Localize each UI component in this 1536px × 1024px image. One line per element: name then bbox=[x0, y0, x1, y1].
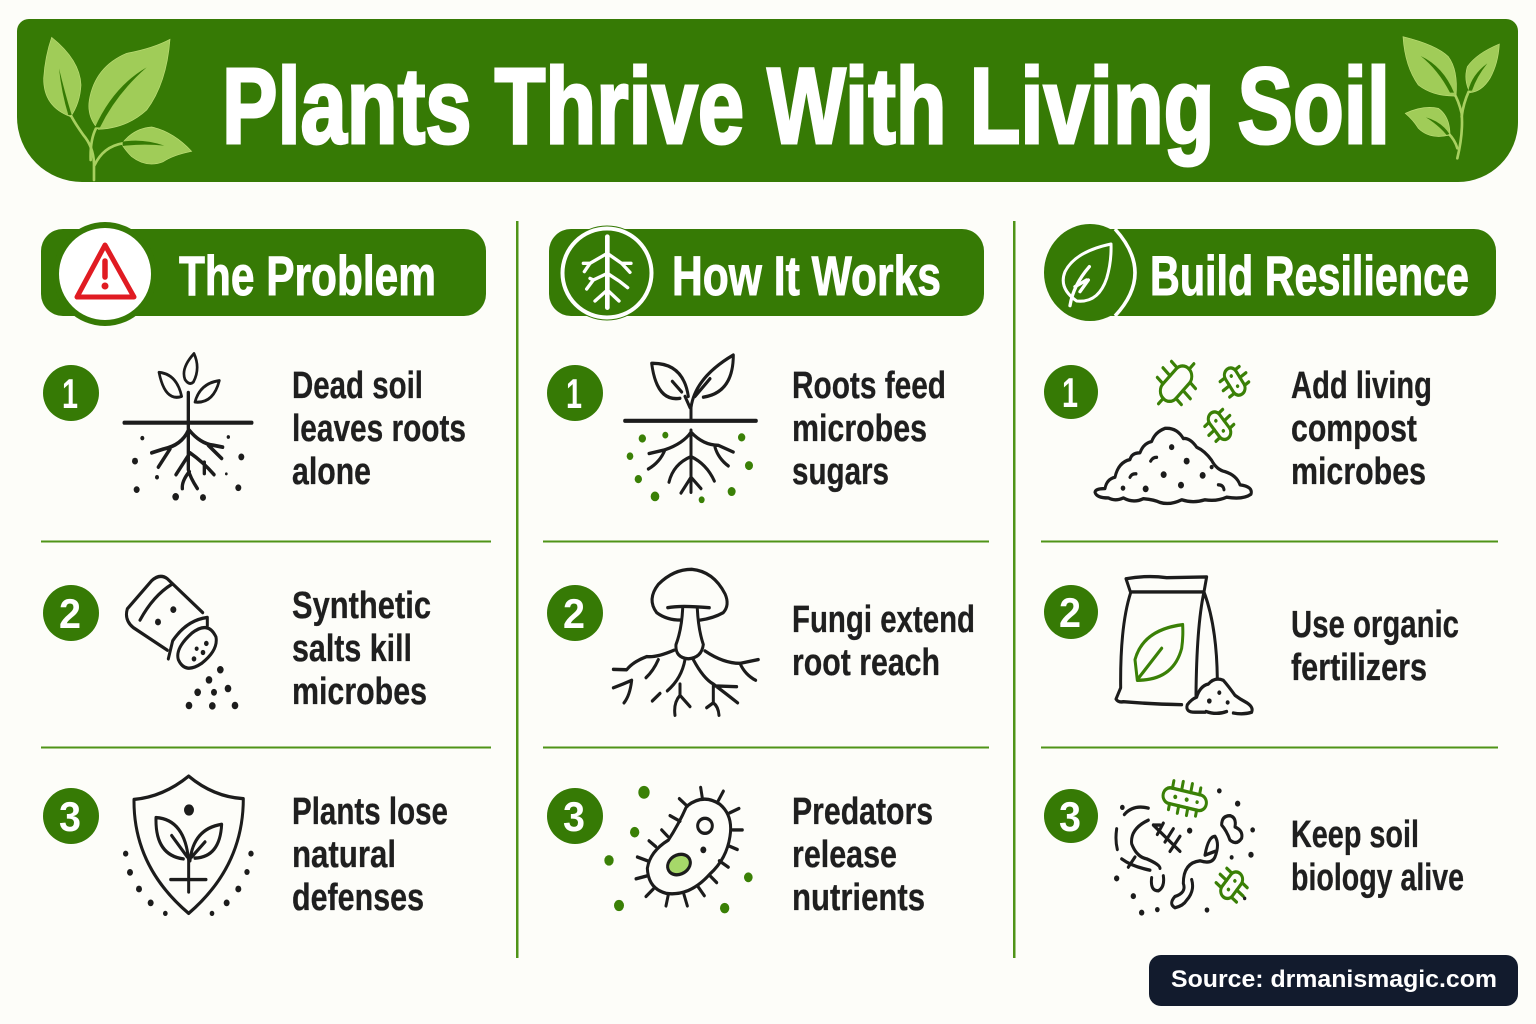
title banner bbox=[17, 19, 1518, 182]
item 3: predators bbox=[547, 786, 933, 919]
text: Keep soil bbox=[1291, 814, 1419, 856]
item 1: dead soil bbox=[43, 354, 466, 501]
heading: build resilience bbox=[1044, 224, 1496, 321]
item 2: fungi bbox=[547, 569, 975, 715]
source badge: Source: drmanismagic.com bbox=[1171, 966, 1497, 993]
text: Roots feed bbox=[792, 365, 946, 407]
item 3: plant defenses: 3 bbox=[59, 793, 81, 840]
icon: left leaves bbox=[44, 37, 192, 180]
source badge bbox=[1149, 955, 1518, 1006]
icon: salt shaker bbox=[126, 576, 238, 710]
item 1: dead soil: leaves roots bbox=[292, 408, 466, 450]
item 3: soil biology: biology alive bbox=[1291, 857, 1464, 899]
heading: the problem: The Problem bbox=[179, 244, 436, 307]
icon: microbe bbox=[604, 786, 753, 913]
item 2: fungi: root reach bbox=[792, 642, 940, 684]
text: Plants lose bbox=[292, 791, 448, 833]
text: Fungi extend bbox=[792, 599, 975, 641]
item 3: soil biology bbox=[1044, 777, 1464, 916]
text: Dead soil bbox=[292, 365, 423, 407]
item 2: synthetic salts: microbes bbox=[292, 671, 427, 713]
item 3: soil biology: 3 bbox=[1059, 793, 1081, 840]
item 2: synthetic salts: 2 bbox=[59, 590, 81, 637]
item 1: roots feed microbes: 1 bbox=[566, 370, 582, 417]
item 2: synthetic salts: salts kill bbox=[292, 628, 412, 670]
icon: fertilizer bag bbox=[1116, 577, 1252, 714]
item 2: organic fertilizer: 2 bbox=[1059, 589, 1081, 636]
heading: how it works bbox=[549, 226, 984, 320]
panel: the problem bbox=[41, 222, 486, 919]
item 1: roots feed microbes: sugars bbox=[792, 451, 889, 493]
text: Synthetic bbox=[292, 585, 431, 627]
item 2: synthetic salts bbox=[43, 576, 431, 713]
icon: compost with microbes bbox=[1095, 348, 1254, 503]
item 3: predators: release bbox=[792, 834, 897, 876]
item 1: compost: 1 bbox=[1062, 369, 1078, 416]
item 3: predators: 3 bbox=[563, 793, 585, 840]
item 1: compost: microbes bbox=[1291, 451, 1426, 493]
item 2: organic fertilizer: fertilizers bbox=[1291, 647, 1427, 689]
item 3: plant defenses: natural bbox=[292, 834, 396, 876]
text: Add living bbox=[1291, 365, 1432, 407]
item 1: roots feed microbes: microbes bbox=[792, 408, 927, 450]
item 2: organic fertilizer bbox=[1044, 577, 1459, 714]
item 1: roots feed microbes bbox=[547, 355, 946, 503]
panel: how it works bbox=[547, 226, 984, 919]
panel: build resilience bbox=[1044, 224, 1496, 916]
item 1: compost: compost bbox=[1291, 408, 1417, 450]
item 1: compost bbox=[1044, 348, 1432, 503]
item 3: plant defenses: defenses bbox=[292, 877, 424, 919]
item 2: fungi: 2 bbox=[563, 590, 585, 637]
icon: dead soil roots bbox=[124, 354, 252, 501]
icon: mushroom with mycelium bbox=[613, 569, 758, 715]
icon: soil biology bbox=[1114, 777, 1255, 916]
item 3: plant defenses bbox=[43, 776, 448, 919]
text: Use organic bbox=[1291, 604, 1459, 646]
icon: right leaves bbox=[1403, 37, 1499, 158]
icon: shield with plant bbox=[123, 776, 254, 916]
column dividers bbox=[41, 221, 1498, 958]
text: Predators bbox=[792, 791, 933, 833]
item 3: predators: nutrients bbox=[792, 877, 925, 919]
item 1: dead soil: alone bbox=[292, 451, 371, 493]
item 1: dead soil: 1 bbox=[62, 370, 78, 417]
heading: how it works: How It Works bbox=[672, 244, 941, 307]
icon: seedling with roots bbox=[625, 355, 756, 503]
heading: the problem bbox=[41, 222, 486, 326]
